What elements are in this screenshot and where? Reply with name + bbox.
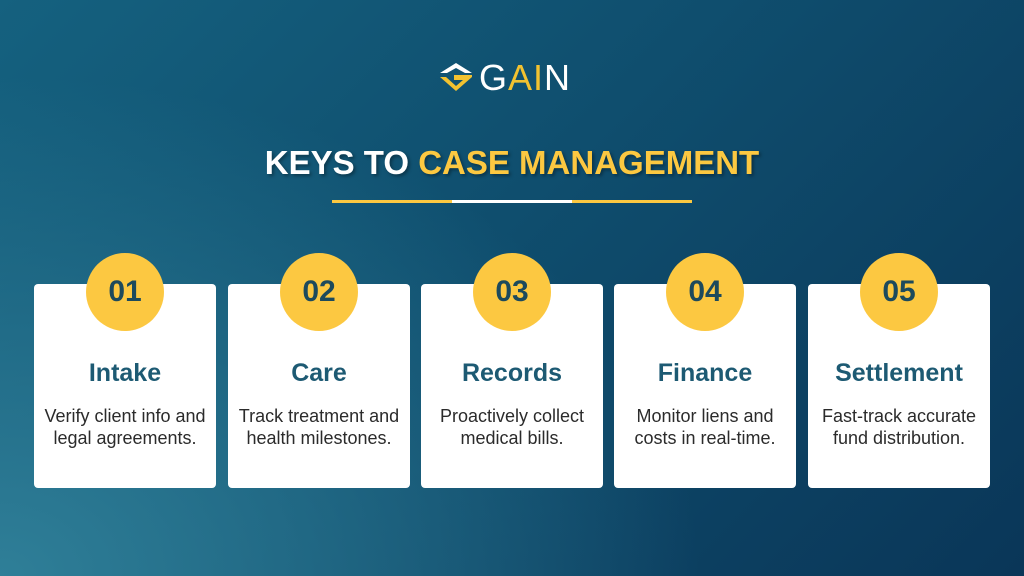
card 01: Intake — [89, 359, 161, 387]
card 05 — [808, 284, 990, 488]
title underline — [332, 200, 692, 203]
card 02: 02 — [302, 275, 336, 308]
card 03 — [421, 284, 603, 488]
card 04 — [614, 284, 796, 488]
logo — [440, 57, 571, 98]
card 04: Finance — [658, 359, 752, 387]
card 02 — [228, 284, 410, 488]
card 02: Care — [291, 359, 347, 387]
card 01: 01 — [108, 275, 142, 308]
card 02: Track treatment and health milestones. — [239, 406, 399, 448]
card 01 — [34, 284, 216, 488]
icon: logo mark — [440, 63, 472, 91]
card 05: Settlement — [835, 359, 963, 387]
title: KEYS TO CASE MANAGEMENT — [265, 144, 759, 181]
card 03: Proactively collect medical bills. — [440, 406, 584, 448]
card 04: costs in real-time. — [634, 428, 776, 448]
card 05: 05 — [882, 275, 916, 308]
card 03: Records — [462, 359, 562, 387]
logo text: GAIN — [479, 57, 571, 98]
card 04: 04 — [688, 275, 722, 308]
card 03: 03 — [495, 275, 529, 308]
card 01: Verify client info and legal agreements. — [44, 406, 206, 448]
card 05: Fast-track accurate fund distribution. — [822, 406, 976, 448]
card 04: Monitor liens and — [636, 406, 774, 426]
